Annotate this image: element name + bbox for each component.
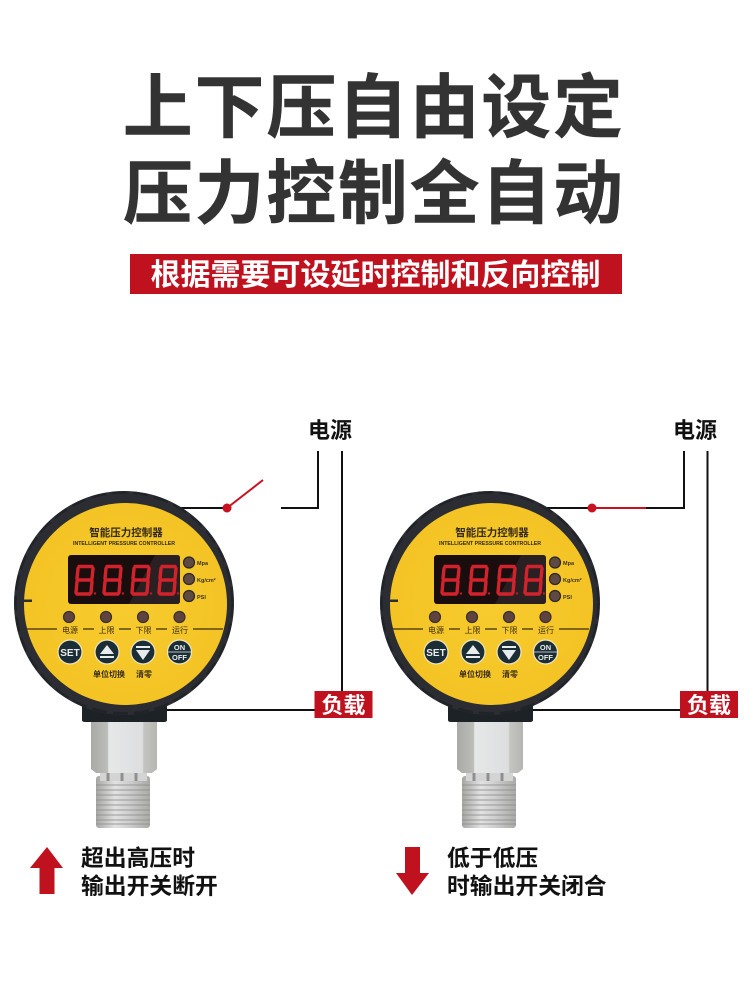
title: 上下压自由设定: [123, 52, 625, 152]
wiring: open switch: [160, 451, 342, 710]
load box: left: 负载: [321, 688, 366, 720]
high pressure note: [81, 840, 218, 901]
title: [123, 52, 625, 238]
high pressure note: 输出开关断开: [81, 868, 218, 901]
low pressure note: 低于低压: [447, 840, 538, 873]
wiring: closed switch: [526, 451, 708, 710]
low pressure note: [447, 840, 607, 901]
down arrow: [396, 847, 429, 895]
high pressure note: 超出高压时: [81, 840, 195, 873]
pressure controller: left: [14, 491, 234, 828]
power label: left: 电源: [308, 413, 352, 445]
title: 压力控制全自动: [123, 138, 625, 238]
subtitle banner: 根据需要可设延时控制和反向控制: [150, 250, 600, 294]
pressure controller: right: [380, 491, 600, 828]
power label: right: 电源: [673, 413, 717, 445]
low pressure note: 时输出开关闭合: [447, 868, 607, 901]
load box: right: 负载: [687, 688, 731, 720]
up arrow: [30, 847, 63, 894]
